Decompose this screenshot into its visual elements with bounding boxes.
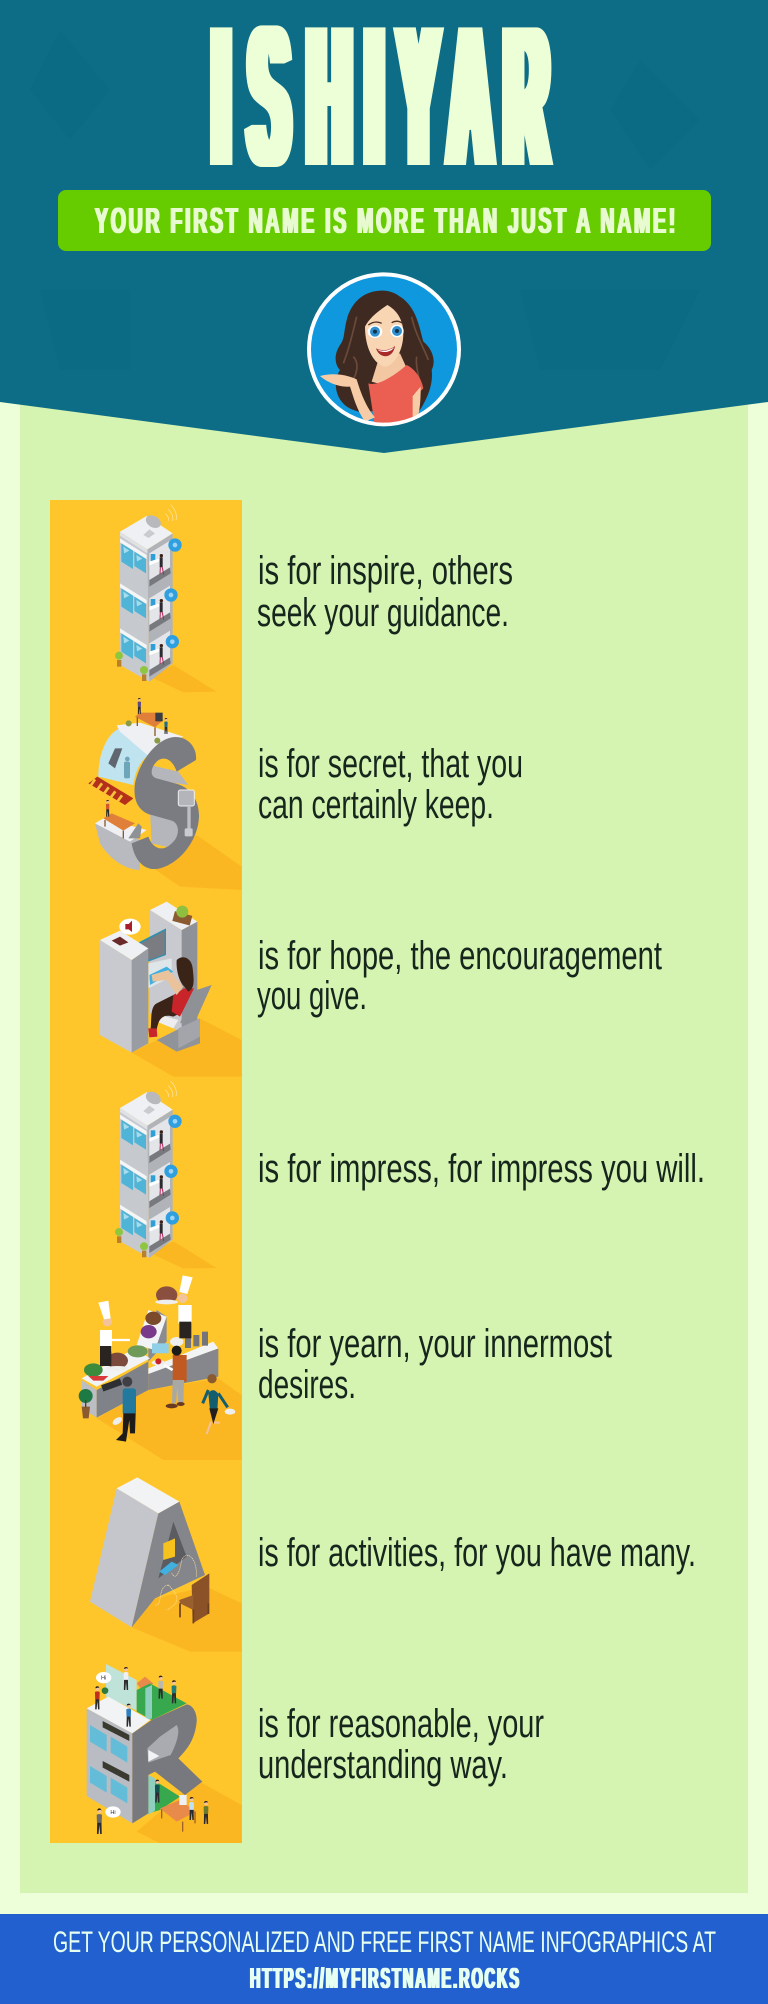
text: R line: is for reasonable, your [258, 1702, 544, 1746]
illustration: letter R [87, 1664, 242, 1843]
illustration: letter H [100, 902, 242, 1077]
subtitle banner [58, 190, 711, 251]
content panel [20, 380, 748, 1893]
speech bubble: Hi [96, 1672, 111, 1683]
illustration: letter S [88, 698, 242, 890]
illustration: letter I building [115, 505, 217, 692]
speech bubble: Hi: Hi [101, 1676, 106, 1682]
text: S line: is for secret, that you [258, 742, 523, 786]
text: R line [258, 1702, 544, 1787]
text: S line: can certainly keep. [258, 783, 494, 827]
speech bubble: Hi [105, 1806, 121, 1818]
illustration: letter I building (repeat) [115, 1081, 217, 1269]
text: Y line [258, 1322, 612, 1407]
header band with chevron [0, 0, 768, 453]
text: Y line: is for yearn, your innermost [258, 1322, 612, 1366]
footer band [0, 1914, 768, 2004]
avatar: woman in circle [309, 274, 459, 427]
text: S line [258, 742, 523, 827]
text: H line: you give. [257, 974, 367, 1018]
text: R line: understanding way. [258, 1743, 508, 1787]
illustration: letter A [90, 1477, 242, 1652]
illustration: letter Y food counter [79, 1275, 242, 1460]
text: I line: is for inspire, others [258, 549, 513, 593]
speech bubble: Hi: Hi [110, 1810, 116, 1816]
text: I line: seek your guidance. [257, 591, 509, 635]
illustration panel [50, 500, 242, 1843]
text: Y line: desires. [258, 1363, 356, 1407]
text: I line [257, 549, 513, 635]
text: H line [257, 934, 662, 1018]
